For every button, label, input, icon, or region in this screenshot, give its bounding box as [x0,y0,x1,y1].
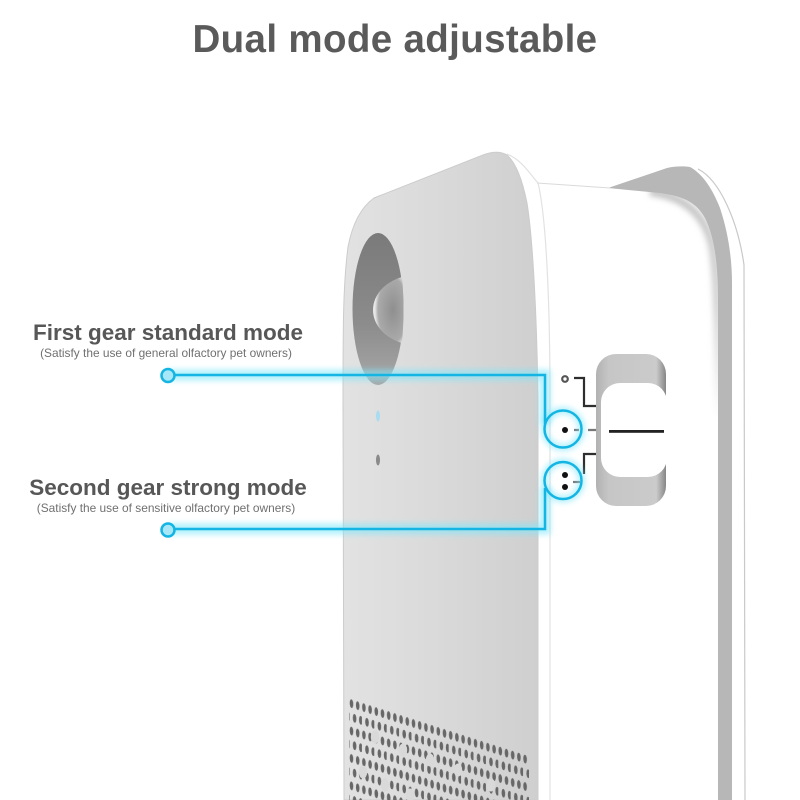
switch slider [601,383,667,477]
position diagram [562,376,596,482]
first gear ring glow [544,410,582,448]
device illustration [343,152,745,800]
second gear heading: Second gear strong mode [29,475,307,500]
white side rim line [507,154,550,800]
sensor hole [352,233,404,385]
slider mark [609,430,664,433]
switch recess [596,354,666,506]
vent gaps [359,730,495,800]
second gear connector glow [168,488,545,529]
second gear connector [175,488,545,529]
position dots [562,427,568,490]
first gear ring [544,410,582,448]
mode switch [562,354,667,506]
grey indicator light [376,454,380,466]
first gear connector [175,375,545,424]
second gear ring glow [544,462,582,499]
front face [343,152,538,800]
first gear start node [162,369,174,382]
far edge rim [698,169,745,800]
vent holes [349,696,529,800]
blue indicator light [376,410,380,422]
sensor lens [373,277,404,343]
far edge grey band [608,166,732,800]
soft inner shade of right side [650,192,718,420]
first gear note: (Satisfy the use of general olfactory pet owners) [40,346,292,360]
second gear note: (Satisfy the use of sensitive olfactory pet owners) [37,501,295,515]
first gear heading: First gear standard mode [33,320,303,345]
top edge of side panel [537,183,610,188]
first gear callout [33,320,582,448]
second gear ring [544,462,582,499]
first gear connector glow [168,375,545,424]
title: Dual mode adjustable [193,18,597,61]
second gear start node [162,524,174,536]
second gear callout [29,462,582,536]
